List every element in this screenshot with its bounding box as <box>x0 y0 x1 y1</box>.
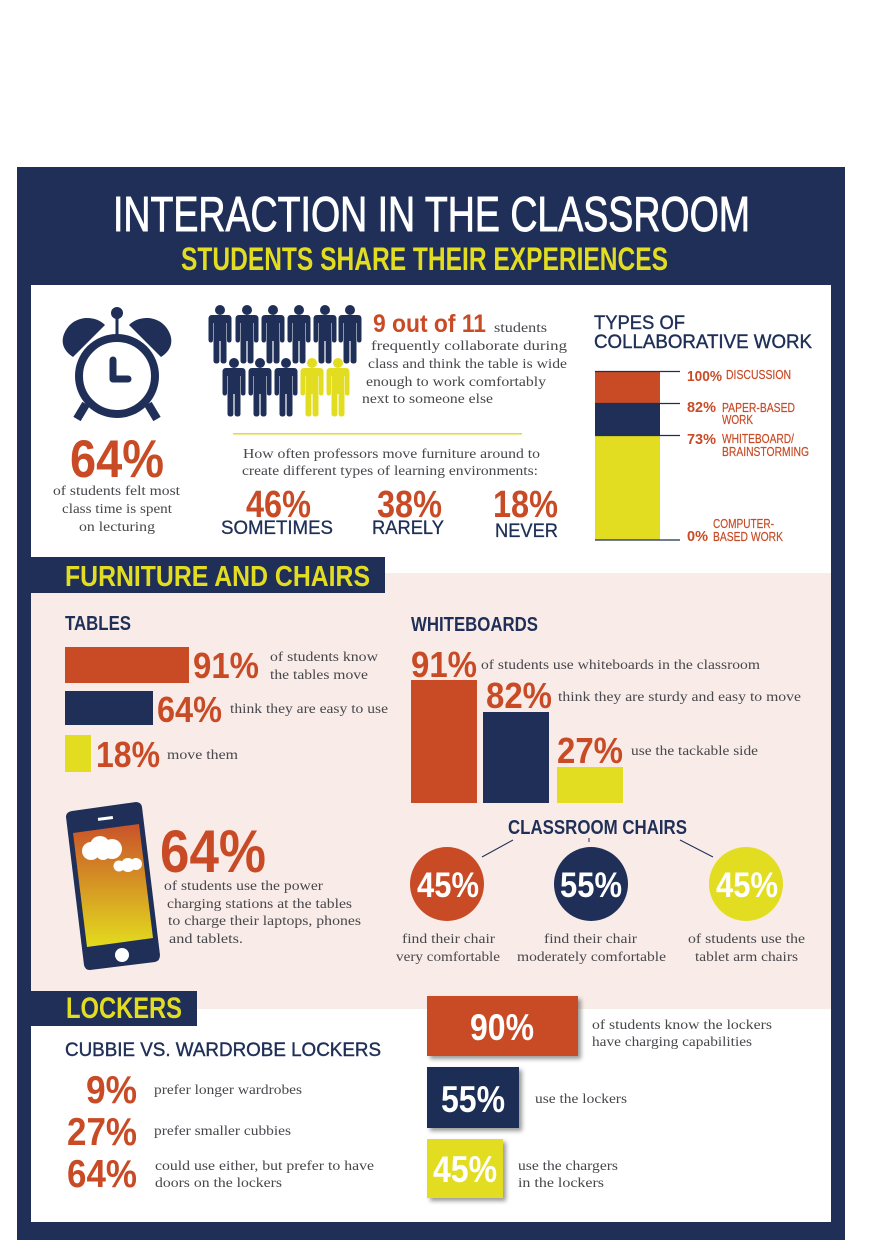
stat: never: 18% <box>493 484 558 526</box>
banner: furniture and chairs: FURNITURE AND CHAIRS <box>65 561 370 593</box>
pictogram: 9 of 11 students <box>208 305 362 416</box>
text: 9 out of 11: frequently collaborate during <box>371 339 567 354</box>
panel: whiteboards: 82% <box>486 675 552 716</box>
heading: TABLES <box>65 613 131 635</box>
callout: phone charging <box>66 802 361 970</box>
banner: lockers <box>31 991 197 1026</box>
panel: whiteboards: think they are sturdy and easy to move <box>558 690 801 705</box>
heading: TYPES OF <box>594 313 685 334</box>
text: charging caption <box>164 879 361 947</box>
heading: CLASSROOM CHAIRS <box>508 816 687 839</box>
white content panel <box>31 285 831 1222</box>
text: professors move furniture: How often professors move furniture around to <box>243 447 540 462</box>
chair stat: tablet arm: of students use the <box>688 932 805 947</box>
chair stat: very comfortable: find their chair <box>402 932 495 947</box>
panel: cubbie vs wardrobe: 27% <box>67 1111 137 1154</box>
chair stat: moderately comfortable: 55% <box>560 866 622 905</box>
panel: lecturing stat <box>53 307 180 535</box>
text: charging caption: and tablets. <box>169 932 243 947</box>
chart: types of collaborative work <box>594 313 812 545</box>
text: 9 out of 11 <box>362 310 567 407</box>
icon: phone <box>66 802 160 970</box>
panel: cubbie vs wardrobe: doors on the lockers <box>155 1176 282 1191</box>
panel: tables <box>65 613 388 775</box>
panel: classroom chairs <box>396 816 805 965</box>
panel: cubbie vs wardrobe: could use either, but prefer to have <box>155 1159 374 1174</box>
chair stat: moderately comfortable: find their chair <box>544 932 637 947</box>
chart: types of collaborative work: 73% <box>687 432 716 448</box>
text: lecturing caption <box>53 484 180 535</box>
stat box: 55 percent: 55% <box>441 1079 505 1120</box>
chair stat: moderately comfortable <box>517 847 666 965</box>
stat: sometimes <box>221 484 333 539</box>
stat box: 55 percent: use the lockers <box>535 1092 627 1107</box>
divider <box>233 433 522 434</box>
panel: whiteboards: use the tackable side <box>631 744 758 759</box>
text: charging caption: of students use the power <box>164 879 323 894</box>
chart: types of collaborative work: 0% <box>687 529 708 545</box>
stat box: 90 percent: 90% <box>470 1007 534 1048</box>
panel: cubbie vs wardrobe: 9% <box>86 1069 137 1112</box>
stat box: 90 percent <box>427 996 772 1056</box>
icon: alarm clock <box>63 307 171 419</box>
chair stat: very comfortable: very comfortable <box>396 950 500 965</box>
text: 9 out of 11: enough to work comfortably <box>366 375 546 390</box>
chart: types of collaborative work: 82% <box>687 400 716 416</box>
stat box: 45 percent: 45% <box>433 1149 497 1190</box>
panel: tables: 18% <box>96 734 160 775</box>
panel: whiteboards: 91% <box>411 644 477 685</box>
heading <box>594 313 812 353</box>
chair stat: tablet arm: 45% <box>716 866 778 905</box>
stat: never <box>493 484 558 542</box>
chart: types of collaborative work: PAPER-BASED <box>722 400 795 415</box>
heading: CUBBIE VS. WARDROBE LOCKERS <box>65 1040 381 1061</box>
stat: rarely: 38% <box>377 484 442 526</box>
chart: types of collaborative work: DISCUSSION <box>726 367 791 382</box>
panel: cubbie vs wardrobe: prefer longer wardrobes <box>154 1083 302 1098</box>
chart: types of collaborative work: WHITEBOARD/ <box>722 431 794 446</box>
panel: cubbie vs wardrobe: 64% <box>67 1153 137 1196</box>
chair stat: moderately comfortable: moderately comfortable <box>517 950 666 965</box>
text: 9 out of 11: next to someone else <box>362 392 493 407</box>
panel: whiteboards: of students use whiteboards in the classroom <box>481 658 760 673</box>
chart: types of collaborative work: COMPUTER- <box>713 516 774 531</box>
text: professors move furniture: create different types of learning environments: <box>242 464 538 479</box>
text: 9 out of 11: class and think the table is wide <box>368 357 567 372</box>
panel: tables: move them <box>167 748 238 763</box>
chart: types of collaborative work: BASED WORK <box>713 529 783 544</box>
panel: whiteboards <box>411 614 801 803</box>
banner: lockers: LOCKERS <box>66 992 182 1025</box>
stat: rarely: RARELY <box>372 518 444 539</box>
subtitle: STUDENTS SHARE THEIR EXPERIENCES <box>181 241 668 277</box>
stat: never: NEVER <box>495 521 558 542</box>
chair stat: tablet arm: tablet arm chairs <box>695 950 798 965</box>
panel: tables: think they are easy to use <box>230 702 388 717</box>
chair stat: very comfortable <box>396 847 500 965</box>
text: lecturing caption: of students felt most <box>53 484 180 499</box>
panel: tables: 64% <box>157 689 222 730</box>
panel: cubbie vs wardrobe: prefer smaller cubbies <box>154 1124 291 1139</box>
chart: types of collaborative work: 100% <box>687 369 722 385</box>
text: lecturing caption: on lecturing <box>79 520 155 535</box>
heading: WHITEBOARDS <box>411 614 538 636</box>
stat: 64 percent: 64% <box>160 818 266 885</box>
panel: cubbie vs wardrobe <box>65 1040 381 1196</box>
stat box: 45 percent: use the chargers <box>518 1159 618 1174</box>
text: charging caption: charging stations at the tables <box>167 897 352 912</box>
stat: rarely <box>372 484 444 539</box>
stat box: 90 percent: of students know the lockers <box>592 1018 772 1033</box>
panel: whiteboards: 27% <box>557 730 623 771</box>
chair stat: tablet arm <box>688 847 805 965</box>
stat: sometimes: SOMETIMES <box>221 518 333 539</box>
chart: types of collaborative work: BRAINSTORMING <box>722 444 809 459</box>
text: 9 out of 11: students <box>494 321 547 336</box>
text: 9 out of 11: 9 out of 11 <box>373 310 486 338</box>
panel: tables: 91% <box>193 645 259 686</box>
stat: 64 percent: 64% <box>70 430 164 489</box>
stat box: 90 percent: have charging capabilities <box>592 1035 752 1050</box>
stat box: 55 percent <box>427 1067 627 1128</box>
stat: sometimes: 46% <box>246 484 311 526</box>
pink section background <box>31 573 831 1009</box>
text: professors move furniture <box>242 447 540 479</box>
chart: types of collaborative work: WORK <box>722 412 753 427</box>
panel: tables: of students know <box>270 650 379 665</box>
stat box: 45 percent: in the lockers <box>518 1176 604 1191</box>
panel: tables: the tables move <box>270 668 368 683</box>
text: lecturing caption: class time is spent <box>62 502 172 517</box>
stat box: 45 percent <box>427 1139 618 1198</box>
chair stat: very comfortable: 45% <box>417 866 479 905</box>
text: charging caption: to charge their laptops, phones <box>168 914 361 929</box>
heading: COLLABORATIVE WORK <box>594 332 812 353</box>
